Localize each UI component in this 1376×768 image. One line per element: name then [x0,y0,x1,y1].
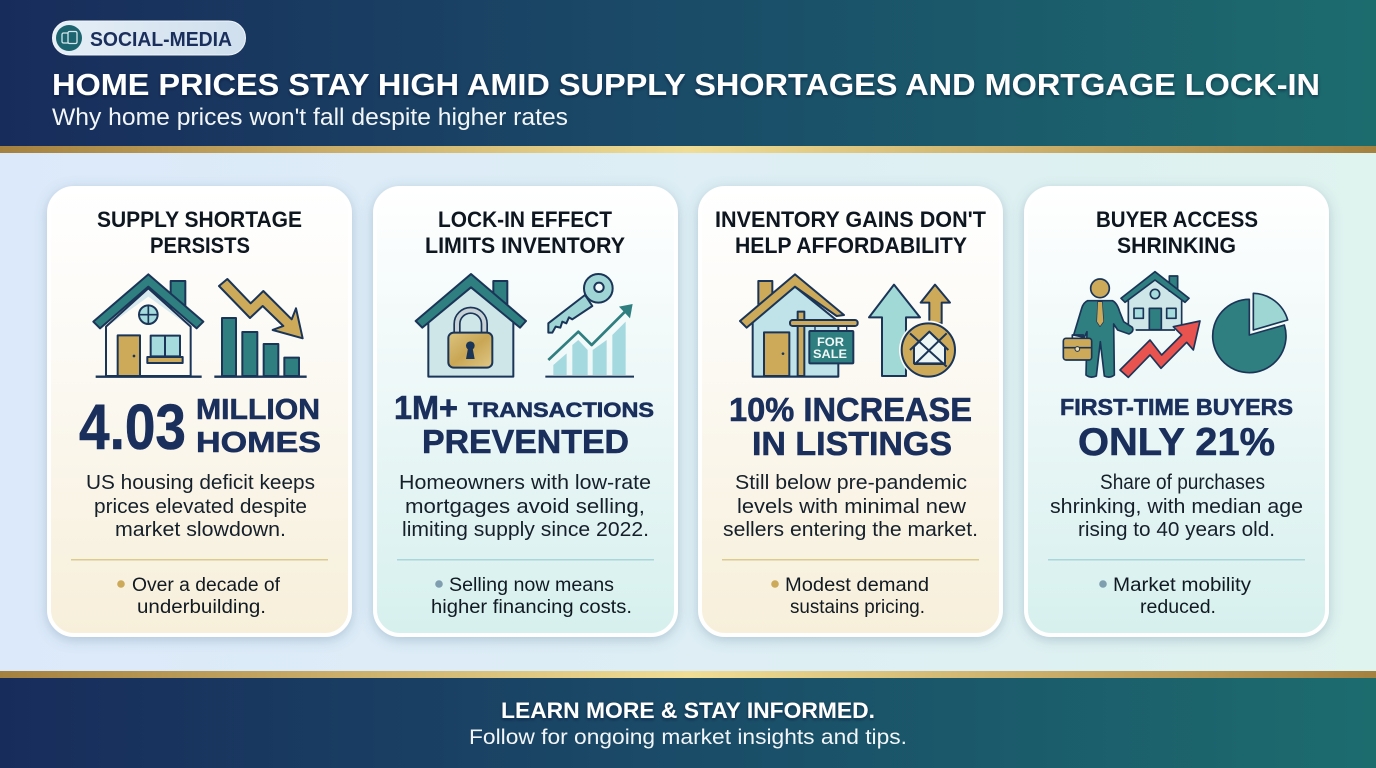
stat: 10% increase in listings [729,391,972,462]
heading: lock-in effect: LOCK-IN EFFECT [438,207,613,232]
badge: social-media: SOCIAL-MEDIA [90,29,232,51]
label: for sale sign: SALE [813,347,847,361]
label: for sale sign [813,335,847,361]
stat: 4.03 million homes: HOMES [196,427,321,459]
heading: supply shortage: PERSISTS [150,233,250,258]
body text [86,471,315,541]
stat: first-time buyers only 21%: ONLY 21% [1078,421,1275,464]
bullet note: Over a decade of [132,575,281,596]
icon: locked house [416,274,526,377]
bullet note: higher financing costs. [431,597,632,618]
stat: 4.03 million homes: MILLION [196,394,320,426]
page background [0,150,1376,675]
footer heading: LEARN MORE & STAY INFORMED. [501,698,875,723]
body text: shrinking, with median age [1050,495,1303,518]
heading: buyer access: SHRINKING [1117,233,1236,258]
heading: supply shortage: SUPPLY SHORTAGE [97,207,302,232]
panel: buyer access [1026,188,1327,635]
body text [723,471,978,541]
bullet note [1099,575,1252,618]
footer text: Follow for ongoing market insights and tips. [469,726,907,749]
heading: buyer access: BUYER ACCESS [1096,207,1258,232]
icon: house for sale [740,274,858,377]
subtitle: Why home prices won't fall despite higher rates [52,104,568,131]
body text: market slowdown. [115,518,286,541]
title: HOME PRICES STAY HIGH AMID SUPPLY SHORTAGES AND MORTGAGE LOCK-IN [52,68,1320,102]
stat: 1M+ transactions prevented [394,389,654,460]
icon: house [93,274,203,377]
panel: lock-in effect [375,188,676,635]
body text [399,471,651,541]
body text: rising to 40 years old. [1078,518,1275,541]
body text [1050,470,1303,541]
stat: 10% increase in listings: IN LISTINGS [752,425,952,462]
panel: inventory gains [700,188,1001,635]
body text: Share of purchases [1100,470,1265,494]
heading: buyer access [1096,207,1258,258]
stat: 10% increase in listings: 10% INCREASE [729,391,972,428]
stat: first-time buyers only 21%: FIRST-TIME BUYERS [1060,394,1293,420]
icon: pie chart [1213,293,1288,373]
bullet note: Market mobility [1113,575,1252,596]
body text: mortgages avoid selling, [405,495,645,518]
bullet note: underbuilding. [137,597,266,618]
icon: falling chart [214,279,307,377]
bullet note [117,575,281,618]
stat: 1M+ transactions prevented: 1M+ [394,389,458,426]
body text: prices elevated despite [94,495,307,518]
bullet note [431,575,632,618]
heading: lock-in effect [425,207,625,258]
stat: 1M+ transactions prevented: PREVENTED [422,423,629,460]
bullet note [771,575,929,618]
body text: Homeowners with low-rate [399,471,651,494]
heading: inventory gains: HELP AFFORDABILITY [735,233,967,258]
panel: supply shortage [49,188,350,635]
heading: inventory gains [715,207,987,258]
heading: inventory gains: INVENTORY GAINS DON'T [715,207,987,232]
stat: 4.03 million homes: 4.03 [79,391,186,463]
icon: up arrows and crossed house [869,285,958,379]
label: for sale sign: FOR [817,335,844,349]
heading: supply shortage [97,207,302,258]
bullet note: Modest demand [785,575,929,596]
body text: levels with minimal new [737,495,966,518]
stat: 4.03 million homes [79,391,321,463]
icon: buyer, house and arrow [1063,272,1200,377]
bullet note: reduced. [1140,597,1216,618]
bullet note: Selling now means [449,575,614,596]
body text: sellers entering the market. [723,518,978,541]
icon: key and rising chart [545,274,634,377]
header band [0,0,1376,153]
body text: limiting supply since 2022. [402,518,649,541]
bullet note: sustains pricing. [790,597,925,618]
stat: first-time buyers only 21% [1060,394,1293,464]
footer band [0,671,1376,768]
body text: US housing deficit keeps [86,471,315,494]
body text: Still below pre-pandemic [735,471,967,494]
stat: 1M+ transactions prevented: TRANSACTIONS [468,399,654,422]
heading: lock-in effect: LIMITS INVENTORY [425,233,625,258]
badge: social-media [52,21,246,55]
